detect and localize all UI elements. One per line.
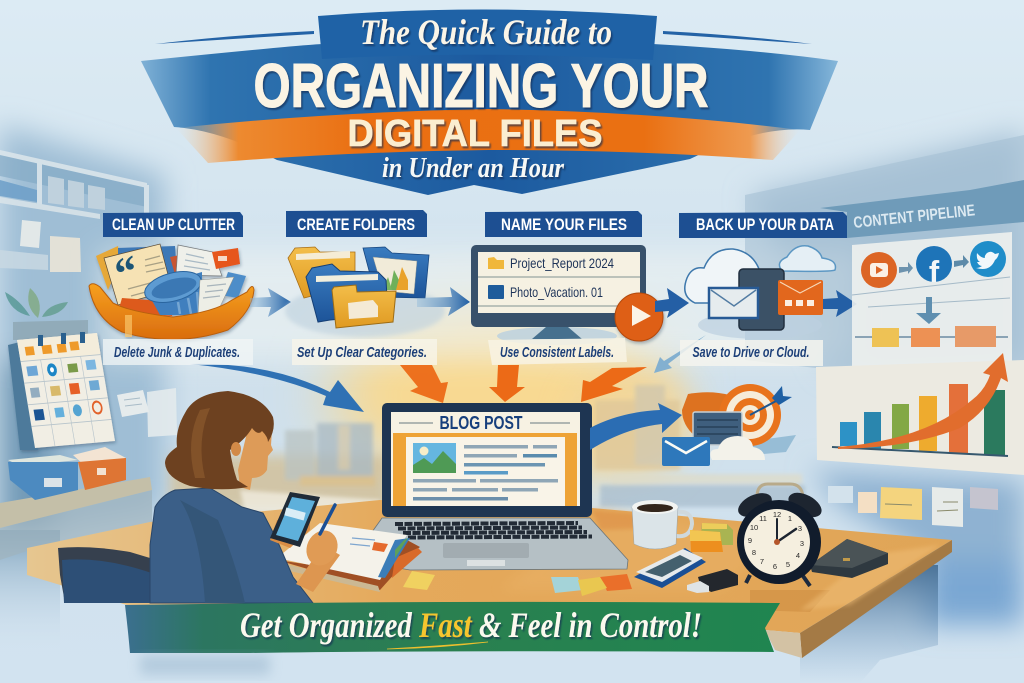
file icon: photo: [488, 285, 504, 299]
image thumbnail: [413, 443, 456, 473]
icon: basket of clutter: “: [110, 246, 143, 299]
caption: Set Up Clear Categories.: [297, 344, 427, 361]
icon: facebook circle: [916, 246, 952, 289]
icon: video circle: [861, 252, 897, 288]
caption: Save to Drive or Cloud.: [692, 344, 810, 361]
blog post heading: BLOG POST: [440, 413, 522, 433]
closing message: Get Organized Fast & Feel in Control!: [240, 605, 702, 645]
background: blurred office blocks behind laptop: [240, 385, 805, 515]
shadow under banner: [140, 655, 270, 675]
bars: [840, 384, 1005, 455]
pipeline panel body: [852, 232, 1012, 368]
curved blue arrow from step 1 to laptop: [190, 364, 364, 412]
laptop: [352, 403, 628, 570]
title line 2: ORGANIZING YOUR: [254, 52, 708, 121]
panel: growth bar chart: [816, 353, 1024, 475]
divider lines: [852, 277, 1010, 307]
alarm clock: 12: [773, 510, 781, 519]
light arrow from step 4 to laptop: [654, 335, 706, 373]
heading: [286, 210, 427, 237]
step 2: create folders: [285, 210, 445, 365]
heading: CREATE FOLDERS: [297, 216, 415, 234]
alarm clock: 3: [800, 539, 804, 548]
heading: BACK UP YOUR DATA: [696, 216, 834, 234]
desk: [27, 500, 952, 683]
hair: [165, 391, 274, 489]
icon: facebook circle: f: [929, 254, 940, 289]
alarm clock: 4: [796, 551, 800, 560]
alarm clock: 7: [760, 557, 764, 566]
alarm clock: 9: [748, 536, 752, 545]
alarm clock: 6: [773, 562, 777, 571]
icon: play button: [615, 293, 663, 341]
alarm clock: 5: [786, 560, 790, 569]
arrow 4: [823, 290, 857, 317]
left wall shelves: [0, 150, 149, 272]
blue curved arrow from laptop to tools: [590, 403, 682, 450]
arrow 3: [655, 288, 689, 318]
orange banner: [176, 109, 800, 163]
title line 1: The Quick Guide to: [360, 12, 612, 52]
smartphone on desk: [634, 548, 706, 588]
growth arrow: [838, 353, 1008, 449]
alarm clock: 3: [798, 524, 802, 533]
caption: [103, 339, 253, 365]
title banner: [141, 10, 838, 195]
icon cluster: email, server, cloud, target: [662, 384, 796, 466]
icon: clouds and devices: [685, 246, 835, 339]
blue main banner: [141, 44, 838, 195]
file name 2: Photo_Vacation. 01: [510, 284, 603, 300]
icon: basket of clutter: [89, 244, 254, 340]
text lines: [413, 445, 558, 500]
alarm clock: 11: [759, 514, 767, 523]
hand with phone: [270, 492, 320, 548]
heading: [485, 211, 642, 237]
chair: [58, 547, 202, 603]
paper sticky notes: [403, 571, 632, 596]
caption: Use Consistent Labels.: [500, 344, 614, 361]
small pinned notes: [117, 388, 177, 437]
arrow: [899, 262, 913, 274]
pipeline heading band: CONTENT PIPELINE: [853, 202, 976, 232]
heading: [679, 212, 847, 238]
icon: twitter circle: [970, 241, 1006, 277]
step 3: name your files: [471, 211, 663, 365]
alarm clock: 10: [750, 523, 758, 532]
jacket: [150, 488, 313, 603]
storage boxes and side shelf: [0, 447, 152, 560]
arrow 1: [250, 288, 291, 317]
laptop screen: [382, 403, 592, 517]
external drive: [810, 539, 888, 578]
desk legs: [800, 565, 938, 683]
caption: Delete Junk & Duplicates.: [114, 344, 240, 361]
file name 1: Project_Report 2024: [510, 255, 614, 271]
caption: [292, 339, 437, 365]
alarm clock: 1: [788, 514, 792, 523]
sticky pads on desk: [690, 523, 733, 552]
title line 3: DIGITAL FILES: [348, 113, 602, 155]
alarm clock: [734, 484, 826, 586]
caption: [488, 338, 627, 365]
step 1: clean up clutter: [89, 212, 254, 365]
person working: [150, 391, 343, 603]
top ribbon: [318, 10, 657, 60]
title line 4: in Under an Hour: [382, 153, 565, 184]
step 4: back up your data: [679, 212, 847, 366]
icon: monitor with file names: [471, 245, 646, 345]
coffee mug: [632, 500, 692, 549]
arrow: [954, 255, 969, 268]
heading: CLEAN UP CLUTTER: [112, 216, 235, 234]
file icon: folder: [488, 257, 504, 269]
notebook: [254, 523, 422, 592]
usb drive: [687, 569, 738, 593]
right upper panel backdrop: [745, 135, 1024, 368]
panel: content pipeline: [820, 180, 1024, 368]
orange arrows to laptop: [400, 365, 647, 403]
flourish lines: [155, 31, 812, 44]
icon: wall calendar: [8, 332, 115, 450]
caption: [680, 340, 823, 366]
down arrow: [916, 297, 941, 324]
hand with pen: [296, 505, 343, 592]
pipeline heading band: [820, 180, 1024, 238]
heading: NAME YOUR FILES: [501, 216, 627, 234]
arrow 2: [417, 287, 470, 316]
wall notes under chart: [828, 486, 998, 527]
underline accent: [387, 642, 488, 649]
alarm clock: 8: [752, 548, 756, 557]
plant: [5, 288, 88, 340]
pipeline blocks: [855, 326, 1008, 347]
laptop base: [352, 518, 628, 570]
closing banner: [125, 602, 780, 653]
icon: folders: [285, 247, 445, 337]
heading: [103, 212, 243, 237]
neck and face: [238, 418, 273, 490]
